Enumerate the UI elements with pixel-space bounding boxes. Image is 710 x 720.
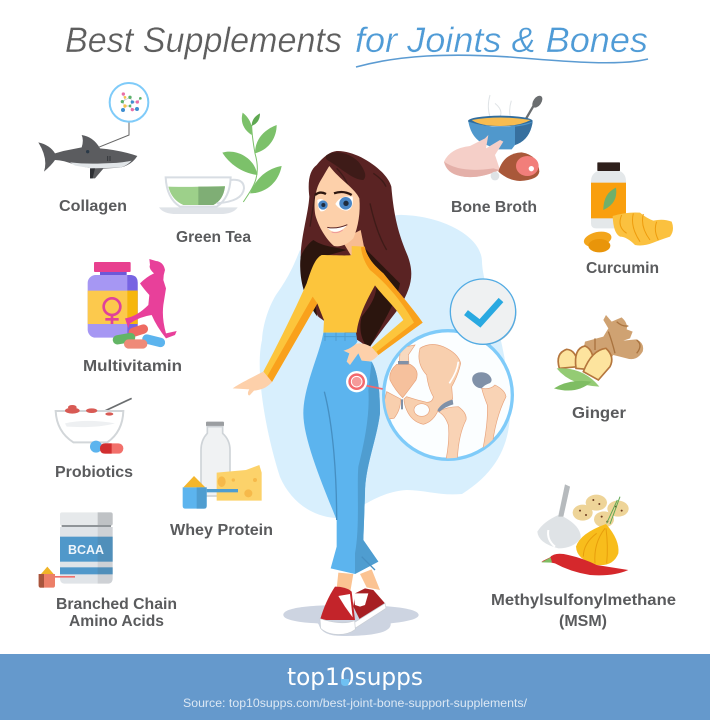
label: Methylsulfonylmethane	[491, 592, 676, 609]
joint inset circle	[383, 331, 512, 460]
legs and ankles	[337, 569, 380, 593]
sweater	[263, 246, 423, 382]
face	[315, 166, 360, 246]
icon: milk bottle, cheese and scoop	[183, 422, 262, 509]
label: Bone Broth	[451, 199, 537, 216]
panel: msm	[491, 484, 676, 630]
icon: ginger root and leaves	[554, 315, 643, 391]
label: Green Tea	[176, 229, 251, 246]
label: Amino Acids	[69, 613, 164, 630]
background blob	[260, 215, 510, 518]
source line: Source: top10supps.com/best-joint-bone-support-supplements/	[183, 696, 528, 710]
panel: woman figure	[233, 151, 516, 636]
label: Whey Protein	[170, 522, 273, 539]
hair	[300, 151, 411, 349]
title: Best Supplements	[65, 21, 342, 60]
jar text: BCAA	[68, 543, 104, 557]
label	[56, 596, 177, 630]
footer band	[0, 654, 710, 720]
panel: whey protein	[170, 422, 273, 539]
neck	[342, 230, 364, 257]
icon: shark with molecule	[38, 83, 148, 178]
panel: curcumin	[582, 162, 673, 277]
label: Probiotics	[55, 464, 133, 481]
panel: multivitamin	[83, 259, 182, 375]
panel: bone broth	[444, 94, 544, 216]
eyes and mouth	[315, 192, 353, 233]
icon: curcumin bottle and turmeric	[582, 162, 673, 252]
shadow	[283, 605, 419, 636]
icon: vitamin jar, runner and pills	[88, 259, 177, 349]
label: Branched Chain	[56, 596, 177, 613]
logo pill	[341, 679, 349, 686]
check badge	[450, 279, 516, 345]
panel: collagen	[38, 83, 148, 215]
icon: tea cup with leaves	[159, 113, 282, 214]
jeans	[303, 333, 380, 574]
icon: yogurt bowl and capsule	[56, 398, 132, 454]
panel: green tea	[159, 113, 282, 246]
label: Ginger	[572, 405, 626, 422]
panel: probiotics	[55, 398, 133, 481]
joint cartilage	[398, 361, 492, 412]
panel: ginger	[554, 315, 643, 422]
icon: BCAA jar and scoop	[39, 512, 113, 588]
shoes	[320, 587, 386, 634]
panel: branched chain amino acids	[39, 512, 177, 630]
label: Collagen	[59, 198, 127, 215]
logo: top10supps	[287, 663, 423, 691]
label: (MSM)	[559, 613, 607, 630]
icon: soup bowl, chicken and ham	[444, 94, 544, 181]
title	[65, 21, 648, 67]
label	[491, 592, 676, 630]
label: Multivitamin	[83, 358, 182, 375]
pain marker	[346, 371, 383, 392]
title: for Joints & Bones	[355, 21, 648, 60]
icon: garlic, seeds, onion and chili	[537, 484, 629, 575]
left hand	[233, 372, 272, 395]
pelvis bones	[383, 345, 506, 460]
hand on hip	[343, 343, 378, 365]
label: Curcumin	[586, 260, 659, 277]
